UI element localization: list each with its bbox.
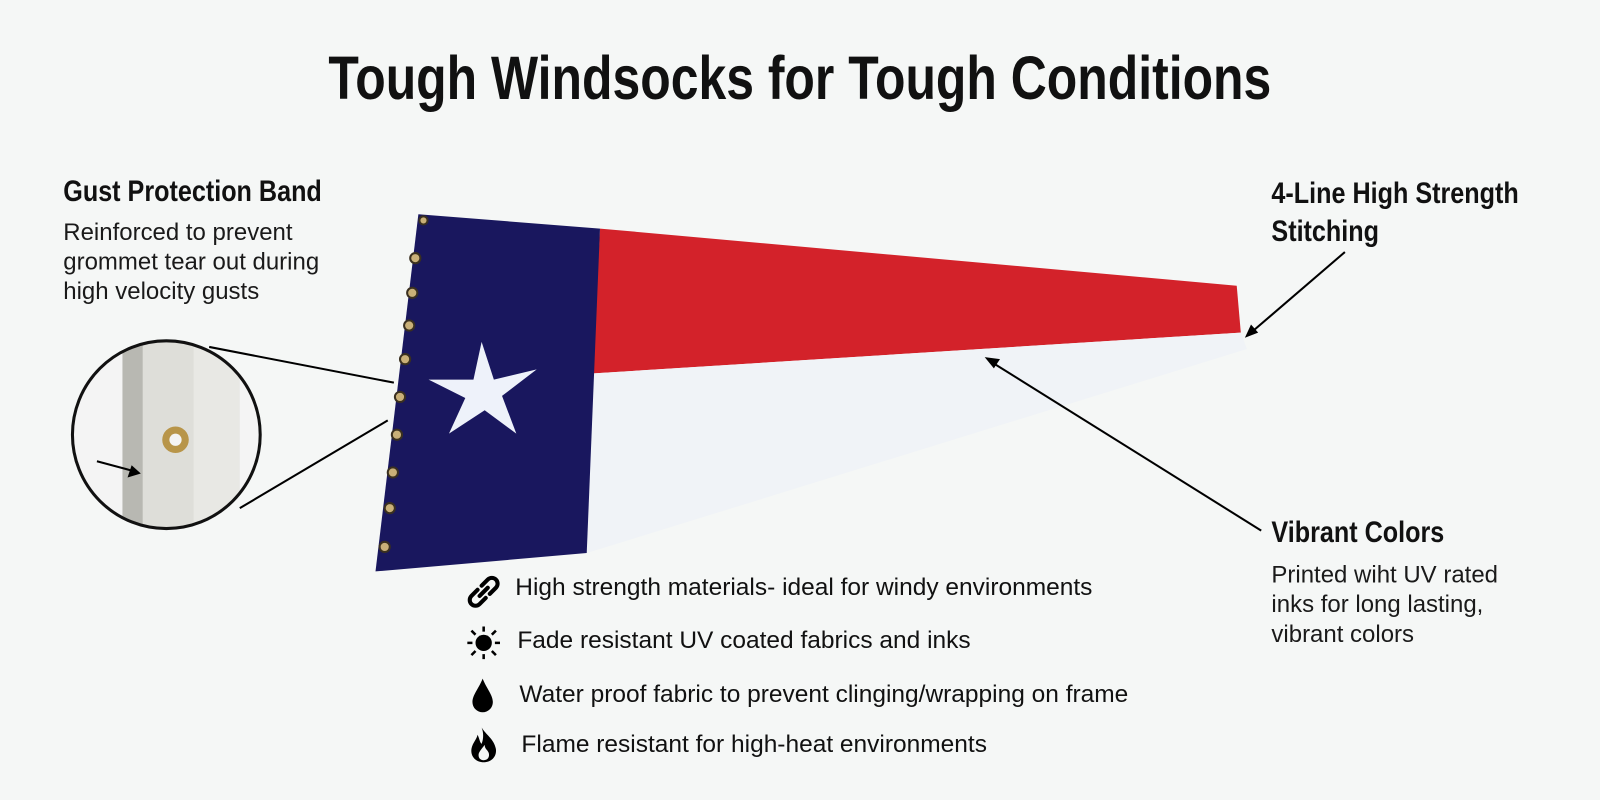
zoom callout circle [70,339,394,530]
feature: uv: Fade resistant UV coated fabrics and inks [517,627,971,654]
feature: flame: Flame resistant for high-heat environments [521,731,987,758]
feature: strength: High strength materials- ideal for windy environments [515,573,1092,601]
callout: vibrant colors: vibrant colors [1271,620,1414,647]
windsock: blue hoist with star [376,214,600,571]
icon: chain link [468,576,500,608]
icon: water drop [472,678,493,712]
title: Tough Windsocks for Tough Conditions [329,44,1271,112]
callout: stitching: 4-Line High Strength [1271,178,1519,210]
callout: gust protection band: high velocity gusts [63,278,259,304]
windsock: white stripe [587,333,1247,553]
callout: gust protection band: Reinforced to prevent [63,218,293,245]
callout: stitching: Stitching [1271,215,1379,248]
windsock illustration [70,214,1346,572]
callout: vibrant colors: Vibrant Colors [1271,516,1444,549]
icon: sun [467,626,500,660]
callout: vibrant colors [1271,516,1498,647]
feature list [467,573,1128,762]
callout: gust protection band: grommet tear out during [63,248,319,274]
arrow: stitching [1245,252,1345,338]
callout: gust protection band [63,176,322,304]
callout: gust protection band: Gust Protection Band [63,176,322,208]
icon: flame [471,728,496,762]
grommets [380,216,428,552]
callout: vibrant colors: Printed wiht UV rated [1271,561,1498,588]
arrow: vibrant colors [985,357,1261,531]
callout: stitching [1271,178,1519,248]
windsock: red stripe [592,229,1241,373]
callout: vibrant colors: inks for long lasting, [1271,591,1483,617]
feature: water: Water proof fabric to prevent clinging/wrapping on frame [519,681,1128,708]
